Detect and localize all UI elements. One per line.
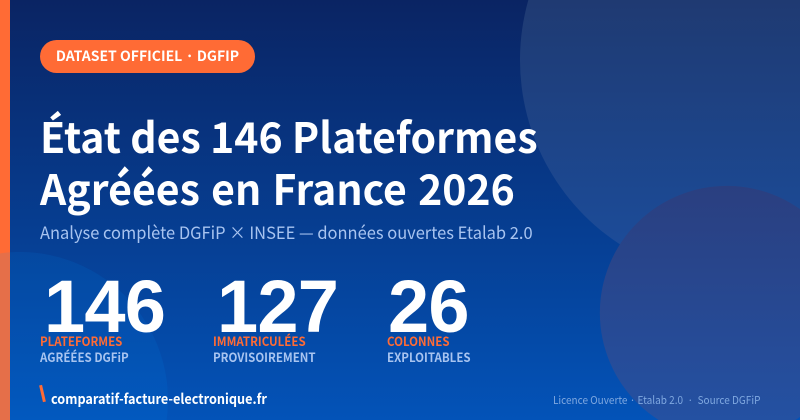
stat number: 127: [217, 265, 338, 348]
stat label accent: COLONNES: [387, 331, 450, 350]
accent bar: [0, 0, 10, 420]
stat: 127 immatriculées: [213, 265, 338, 366]
subtitle: Analyse complète DGFiP × INSEE — données ouvertes Etalab 2.0: [40, 219, 533, 244]
footer licence: Licence Ouverte · Etalab 2.0 · Source DGFiP: [553, 392, 760, 408]
title: État des 146 Plateformes: [40, 105, 538, 166]
stat label: AGRÉÉES DGFiP: [40, 347, 129, 366]
badge: [40, 40, 255, 73]
website url: comparatif-facture-electronique.fr: [51, 389, 267, 409]
stat label: EXPLOITABLES: [387, 347, 471, 366]
title: [40, 105, 538, 218]
stat number: 146: [44, 265, 165, 348]
badge: DATASET OFFICIEL · DGFIP: [56, 46, 239, 66]
stat label accent: IMMATRICULÉES: [213, 331, 306, 350]
stat: 146 plateformes: [40, 265, 165, 366]
stat label: PROVISOIREMENT: [213, 347, 316, 366]
icon: orange slash: [39, 385, 46, 402]
stat number: 26: [388, 265, 469, 348]
stat: 26 colonnes: [387, 265, 471, 366]
stat label accent: PLATEFORMES: [40, 331, 122, 350]
title: Agréées en France 2026: [40, 157, 515, 218]
